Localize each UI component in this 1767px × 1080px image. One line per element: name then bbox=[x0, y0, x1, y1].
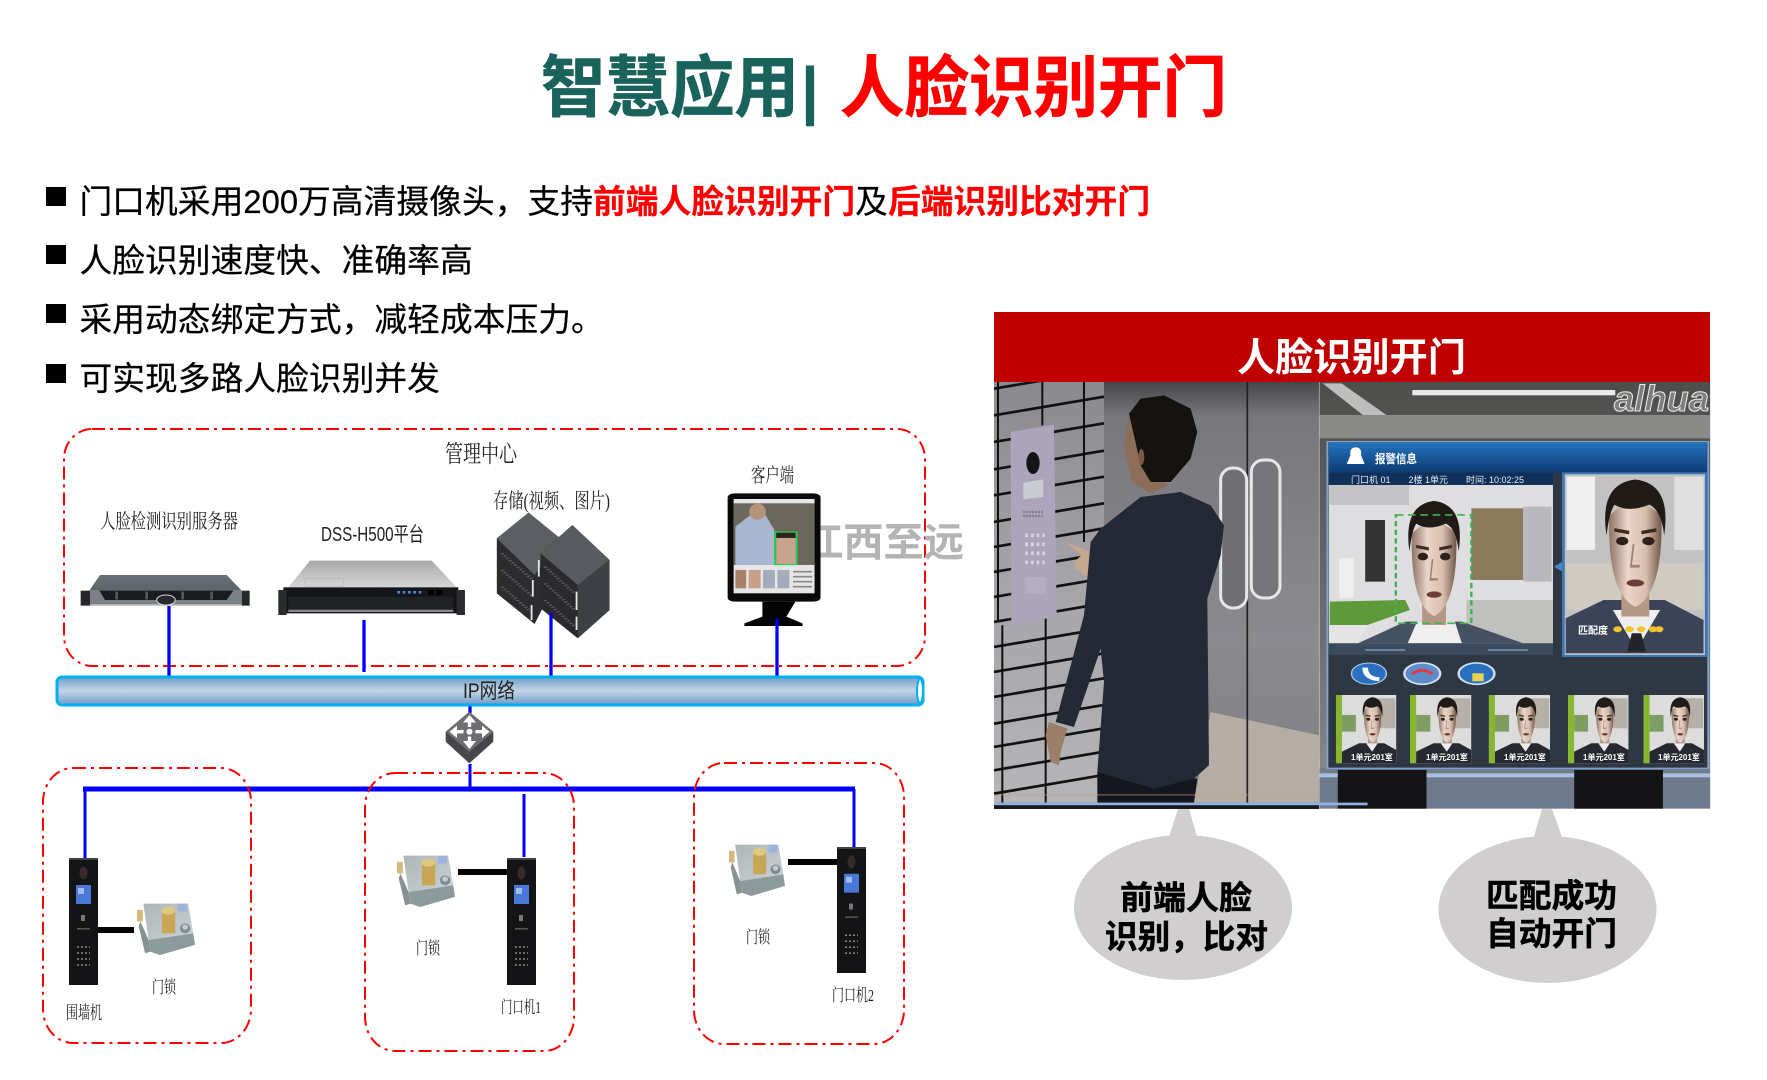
thumbnail captions: 1单元201室 bbox=[1583, 752, 1625, 762]
label: door lock: 门锁 bbox=[746, 927, 771, 947]
icon: wall station bbox=[69, 858, 98, 985]
scene: alarm monitor screen bbox=[1319, 382, 1710, 809]
thumbnail captions: 1单元201室 bbox=[1658, 752, 1700, 762]
icon: face recognition server bbox=[81, 575, 250, 606]
callout: auto open on match bbox=[1438, 809, 1656, 983]
panel header: 人脸识别开门 bbox=[1237, 337, 1466, 380]
IP network pipe: IP网络 bbox=[463, 680, 515, 703]
callout: auto open on match: 自动开门 bbox=[1486, 916, 1617, 952]
label: door lock: 门锁 bbox=[152, 977, 177, 997]
title: 智慧应用 bbox=[541, 51, 799, 126]
callout: auto open on match: 匹配成功 bbox=[1486, 878, 1617, 914]
label: door station 1: 门口机1 bbox=[501, 998, 541, 1017]
icon: door lock bbox=[729, 845, 785, 896]
icon: door station 1 bbox=[507, 858, 536, 985]
bullet 2: 人脸识别速度快、准确率高 bbox=[80, 242, 473, 279]
match info text: 匹配度 bbox=[1578, 624, 1608, 637]
icon: client monitor bbox=[728, 493, 821, 626]
icon: network switch bbox=[446, 712, 493, 763]
title: | bbox=[801, 54, 819, 127]
label: client: 客户端 bbox=[751, 464, 794, 487]
thumbnail captions: 1单元201室 bbox=[1426, 752, 1468, 762]
network uplinks bbox=[169, 606, 777, 713]
icon: door lock bbox=[137, 904, 195, 955]
callout: front-end recognition bbox=[1074, 809, 1292, 980]
connector bbox=[458, 869, 507, 875]
icon: storage arrays bbox=[497, 513, 610, 638]
feature bullet list bbox=[46, 183, 1150, 397]
panel: door station 1 group bbox=[365, 773, 574, 1051]
title: 人脸识别开门 bbox=[840, 51, 1227, 126]
label: storage: 存储(视频、图片) bbox=[493, 489, 610, 513]
panel: wall station group bbox=[43, 768, 251, 1043]
callout: front-end recognition: 前端人脸 bbox=[1120, 880, 1252, 916]
label: door lock: 门锁 bbox=[416, 938, 441, 958]
icon: door lock bbox=[397, 856, 455, 907]
logo text: alhua bbox=[1614, 378, 1709, 419]
bullet 4: 可实现多路人脸识别并发 bbox=[80, 360, 440, 397]
label: face recognition server: 人脸检测识别服务器 bbox=[100, 510, 238, 533]
bullet 1: 门口机采用200万高清摄像头，支持前端人脸识别开门及后端识别比对开门 bbox=[80, 183, 1150, 220]
callout: front-end recognition: 识别，比对 bbox=[1105, 919, 1268, 955]
title bbox=[541, 51, 1227, 127]
thumbnail captions: 1单元201室 bbox=[1504, 752, 1546, 762]
panel header bbox=[994, 312, 1710, 382]
connector bbox=[98, 927, 134, 933]
label: DSS platform: DSS-H500平台 bbox=[321, 523, 424, 546]
blue access bus bbox=[83, 764, 855, 858]
icon: DSS platform server bbox=[278, 561, 465, 615]
icon: door station 2 bbox=[837, 847, 866, 973]
thumbnail captions bbox=[1351, 752, 1700, 762]
watermark: 江西至远 bbox=[803, 521, 964, 565]
panel: management center bbox=[64, 429, 964, 666]
scene: person at door intercom bbox=[994, 370, 1367, 809]
bullet 3: 采用动态绑定方式，减轻成本压力。 bbox=[80, 301, 604, 338]
screen header text: 报警信息 bbox=[1375, 451, 1417, 466]
label: management center: 管理中心 bbox=[445, 441, 518, 468]
label: door station 2: 门口机2 bbox=[832, 986, 874, 1005]
thumbnail captions: 1单元201室 bbox=[1351, 752, 1393, 762]
panel: face recognition demo bbox=[994, 312, 1710, 809]
connector bbox=[788, 859, 837, 865]
label: wall station: 围墙机 bbox=[66, 1003, 102, 1023]
IP network pipe bbox=[57, 677, 923, 705]
panel: door station 2 group bbox=[694, 763, 904, 1044]
screen info text: 门口机 01 2楼 1单元 时间: 10:02:25 bbox=[1351, 474, 1524, 485]
